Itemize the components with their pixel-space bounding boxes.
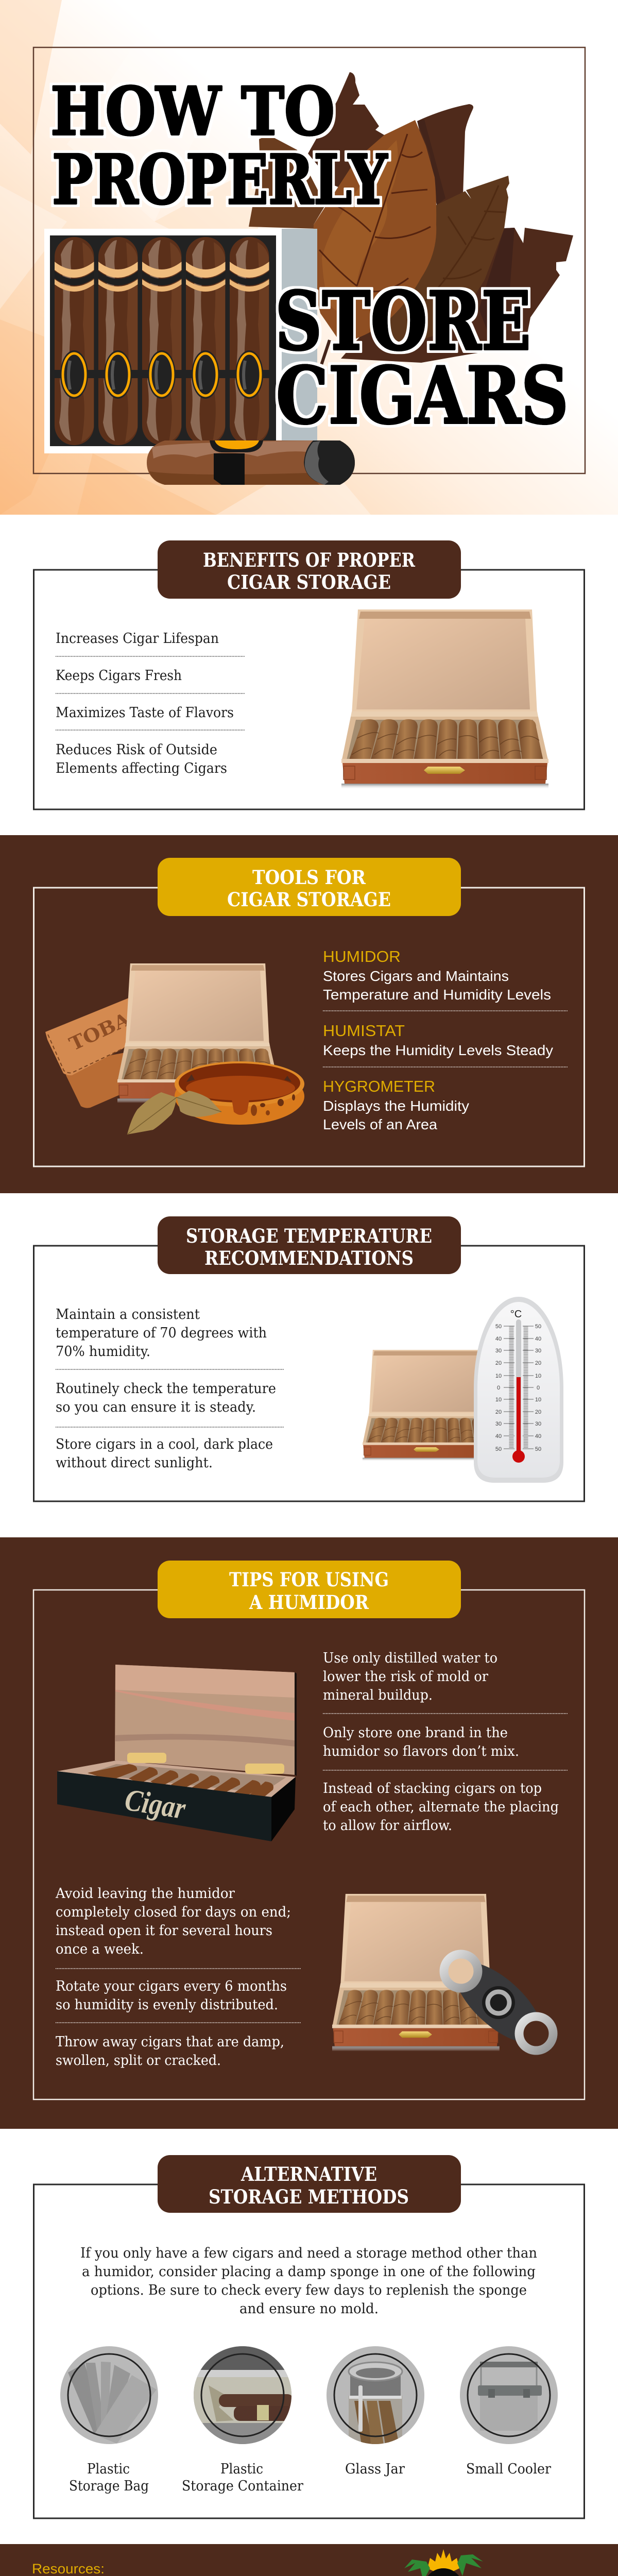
heading: tools (158, 858, 461, 916)
option: glass jar (327, 2346, 424, 2477)
tips list: left: swollen, split or cracked. (56, 2053, 221, 2069)
option: plastic storage container (182, 2346, 303, 2494)
tips list: right: lower the risk of mold or (323, 1669, 488, 1685)
tools list: HUMISTAT (323, 1022, 405, 1040)
tobacco leaves (249, 72, 573, 371)
option: small cooler: Small Cooler (466, 2461, 551, 2477)
illustration: pouch, humidor, ashtray and leaves (45, 963, 304, 1134)
heading: tips (158, 1561, 461, 1618)
panel: benefits (34, 540, 584, 809)
icon: thermometer: 50 (495, 1446, 502, 1452)
intro paragraph: If you only have a few cigars and need a storage method other than (80, 2245, 537, 2261)
heading: temperature (158, 1216, 461, 1274)
tips list: left: Avoid leaving the humidor (55, 1886, 235, 1902)
icon: thermometer: 30 (535, 1421, 541, 1427)
icon: thermometer: 20 (495, 1360, 502, 1366)
heading: tips: TIPS FOR USING (229, 1568, 389, 1591)
heading: tools: CIGAR STORAGE (227, 888, 391, 911)
icon: thermometer: 30 (535, 1348, 541, 1354)
heading: tools: TOOLS FOR (252, 866, 366, 889)
tips list: left: completely closed for days on end; (56, 1904, 291, 1920)
tools list: Temperature and Humidity Levels (323, 987, 551, 1003)
ashtray (175, 1061, 304, 1125)
heading: temperature: RECOMMENDATIONS (204, 1247, 414, 1269)
intro paragraph: a humidor, consider placing a damp sponge in one of the following (82, 2264, 536, 2280)
intro paragraph: and ensure no mold. (239, 2301, 379, 2317)
icon: thermometer: 40 (495, 1336, 502, 1342)
panel: alternative storage (34, 2155, 584, 2518)
option: small cooler (460, 2346, 558, 2477)
hero section (0, 0, 618, 515)
heading: benefits: CIGAR STORAGE (227, 571, 391, 594)
logo: Florida Tobacco Shop (404, 2549, 537, 2576)
heading: tips: A HUMIDOR (249, 1591, 369, 1614)
leather pouch (45, 998, 135, 1108)
image: humidor with cigar cutter (332, 1894, 555, 2056)
icon: thermometer: 50 (535, 1324, 541, 1330)
section: tools background (0, 835, 618, 1193)
temperature list: so you can ensure it is steady. (56, 1399, 256, 1415)
icon: thermometer (474, 1297, 563, 1483)
icon: thermometer: 10 (535, 1397, 541, 1403)
tools list: Keeps the Humidity Levels Steady (323, 1042, 553, 1058)
icon: thermometer: 30 (495, 1348, 502, 1354)
option: plastic storage bag: Plastic (87, 2461, 130, 2477)
option: plastic storage container: Plastic (220, 2461, 263, 2477)
title: STORE (275, 274, 531, 368)
benefits list: Reduces Risk of Outside (56, 742, 217, 758)
intro paragraph: options. Be sure to check every few days to replenish the sponge (91, 2282, 527, 2298)
tips list: right: Only store one brand in the (323, 1725, 508, 1741)
icon: thermometer: 10 (535, 1373, 541, 1379)
tips list: left: Throw away cigars that are damp, (56, 2034, 284, 2050)
tips list: right: humidor so flavors don’t mix. (323, 1743, 519, 1759)
title: PROPERLY (52, 140, 388, 220)
icon: thermometer: 0 (497, 1385, 500, 1391)
intro paragraph (80, 2245, 537, 2317)
tips list: left (55, 1886, 301, 2069)
tools list: Displays the Humidity (323, 1098, 469, 1114)
tips list: left: so humidity is evenly distributed. (56, 1997, 278, 2013)
tips list: left: instead open it for several hours (56, 1923, 272, 1939)
tools list: Levels of an Area (323, 1116, 437, 1132)
icon: thermometer: 20 (535, 1360, 541, 1366)
title: CIGARS (276, 349, 569, 442)
benefits list: Elements affecting Cigars (56, 760, 227, 776)
tools list: HYGROMETER (323, 1077, 435, 1095)
icon: thermometer: 40 (535, 1433, 541, 1439)
title: HOW TO (50, 73, 335, 150)
icon: thermometer: 0 (537, 1385, 540, 1391)
icon: thermometer: 40 (535, 1336, 541, 1342)
option: plastic storage container: Storage Container (182, 2478, 303, 2494)
icon: thermometer: 10 (495, 1397, 502, 1403)
heading: benefits (158, 540, 461, 599)
loose cigar (147, 440, 355, 485)
tips list: left: once a week. (56, 1941, 144, 1957)
benefits list (56, 631, 245, 776)
panel: tools (34, 858, 584, 1166)
temperature list: Routinely check the temperature (56, 1381, 276, 1397)
panel: temperature (34, 1216, 584, 1501)
humidor (117, 963, 278, 1103)
option: plastic storage bag: Storage Bag (69, 2478, 149, 2494)
tips list: right: mineral buildup. (323, 1687, 433, 1703)
heading: temperature: STORAGE TEMPERATURE (186, 1225, 432, 1247)
benefits list: Keeps Cigars Fresh (56, 668, 182, 684)
temperature list: Store cigars in a cool, dark place (56, 1436, 273, 1452)
heading: alternative storage: ALTERNATIVE (241, 2163, 377, 2185)
image: humidor behind thermometer (363, 1350, 491, 1461)
icon: thermometer: 40 (495, 1433, 502, 1439)
option: plastic storage bag (60, 2346, 158, 2494)
icon: cigar cutter (442, 1949, 555, 2056)
tips list: right (323, 1650, 568, 1834)
cigar box with five cigars (44, 229, 317, 453)
icon: thermometer: 20 (495, 1409, 502, 1415)
benefits list: Increases Cigar Lifespan (56, 631, 219, 647)
icon: thermometer: 10 (495, 1373, 502, 1379)
icon: thermometer: °C (510, 1309, 522, 1320)
image: open humidor (341, 609, 548, 789)
option: glass jar: Glass Jar (345, 2461, 405, 2477)
section: tips background (0, 1537, 618, 2129)
title (50, 73, 569, 442)
dried leaves (127, 1091, 221, 1134)
temperature list: 70% humidity. (56, 1344, 150, 1360)
benefits list: Maximizes Taste of Flavors (56, 705, 234, 721)
temperature list: temperature of 70 degrees with (56, 1325, 267, 1341)
tools list: HUMIDOR (323, 947, 401, 965)
heading: benefits: BENEFITS OF PROPER (203, 549, 415, 571)
image: black cigar box: Cigar (123, 1783, 188, 1825)
footer (0, 2544, 618, 2576)
tips list: right: to allow for airflow. (323, 1818, 452, 1834)
leather pouch: TOBA (66, 1008, 134, 1055)
temperature list: Maintain a consistent (56, 1307, 200, 1323)
icon: thermometer: 20 (535, 1409, 541, 1415)
temperature list: without direct sunlight. (56, 1455, 213, 1471)
tools list (323, 947, 568, 1132)
tools list: Stores Cigars and Maintains (323, 968, 509, 984)
hero frame (33, 47, 585, 473)
temperature list (56, 1307, 284, 1471)
image: black cigar box (57, 1665, 297, 1841)
tips list: right: Instead of stacking cigars on top (323, 1781, 542, 1797)
panel: tips (33, 1561, 585, 2099)
icon: thermometer: 50 (495, 1324, 502, 1330)
icon: thermometer: 30 (495, 1421, 502, 1427)
heading: alternative storage: STORAGE METHODS (209, 2185, 409, 2208)
heading: alternative storage (158, 2155, 461, 2213)
tips list: right: of each other, alternate the placing (323, 1799, 559, 1815)
tips list: left: Rotate your cigars every 6 months (56, 1978, 287, 1994)
tips list: right: Use only distilled water to (323, 1650, 497, 1666)
icon: thermometer: 50 (535, 1446, 541, 1452)
